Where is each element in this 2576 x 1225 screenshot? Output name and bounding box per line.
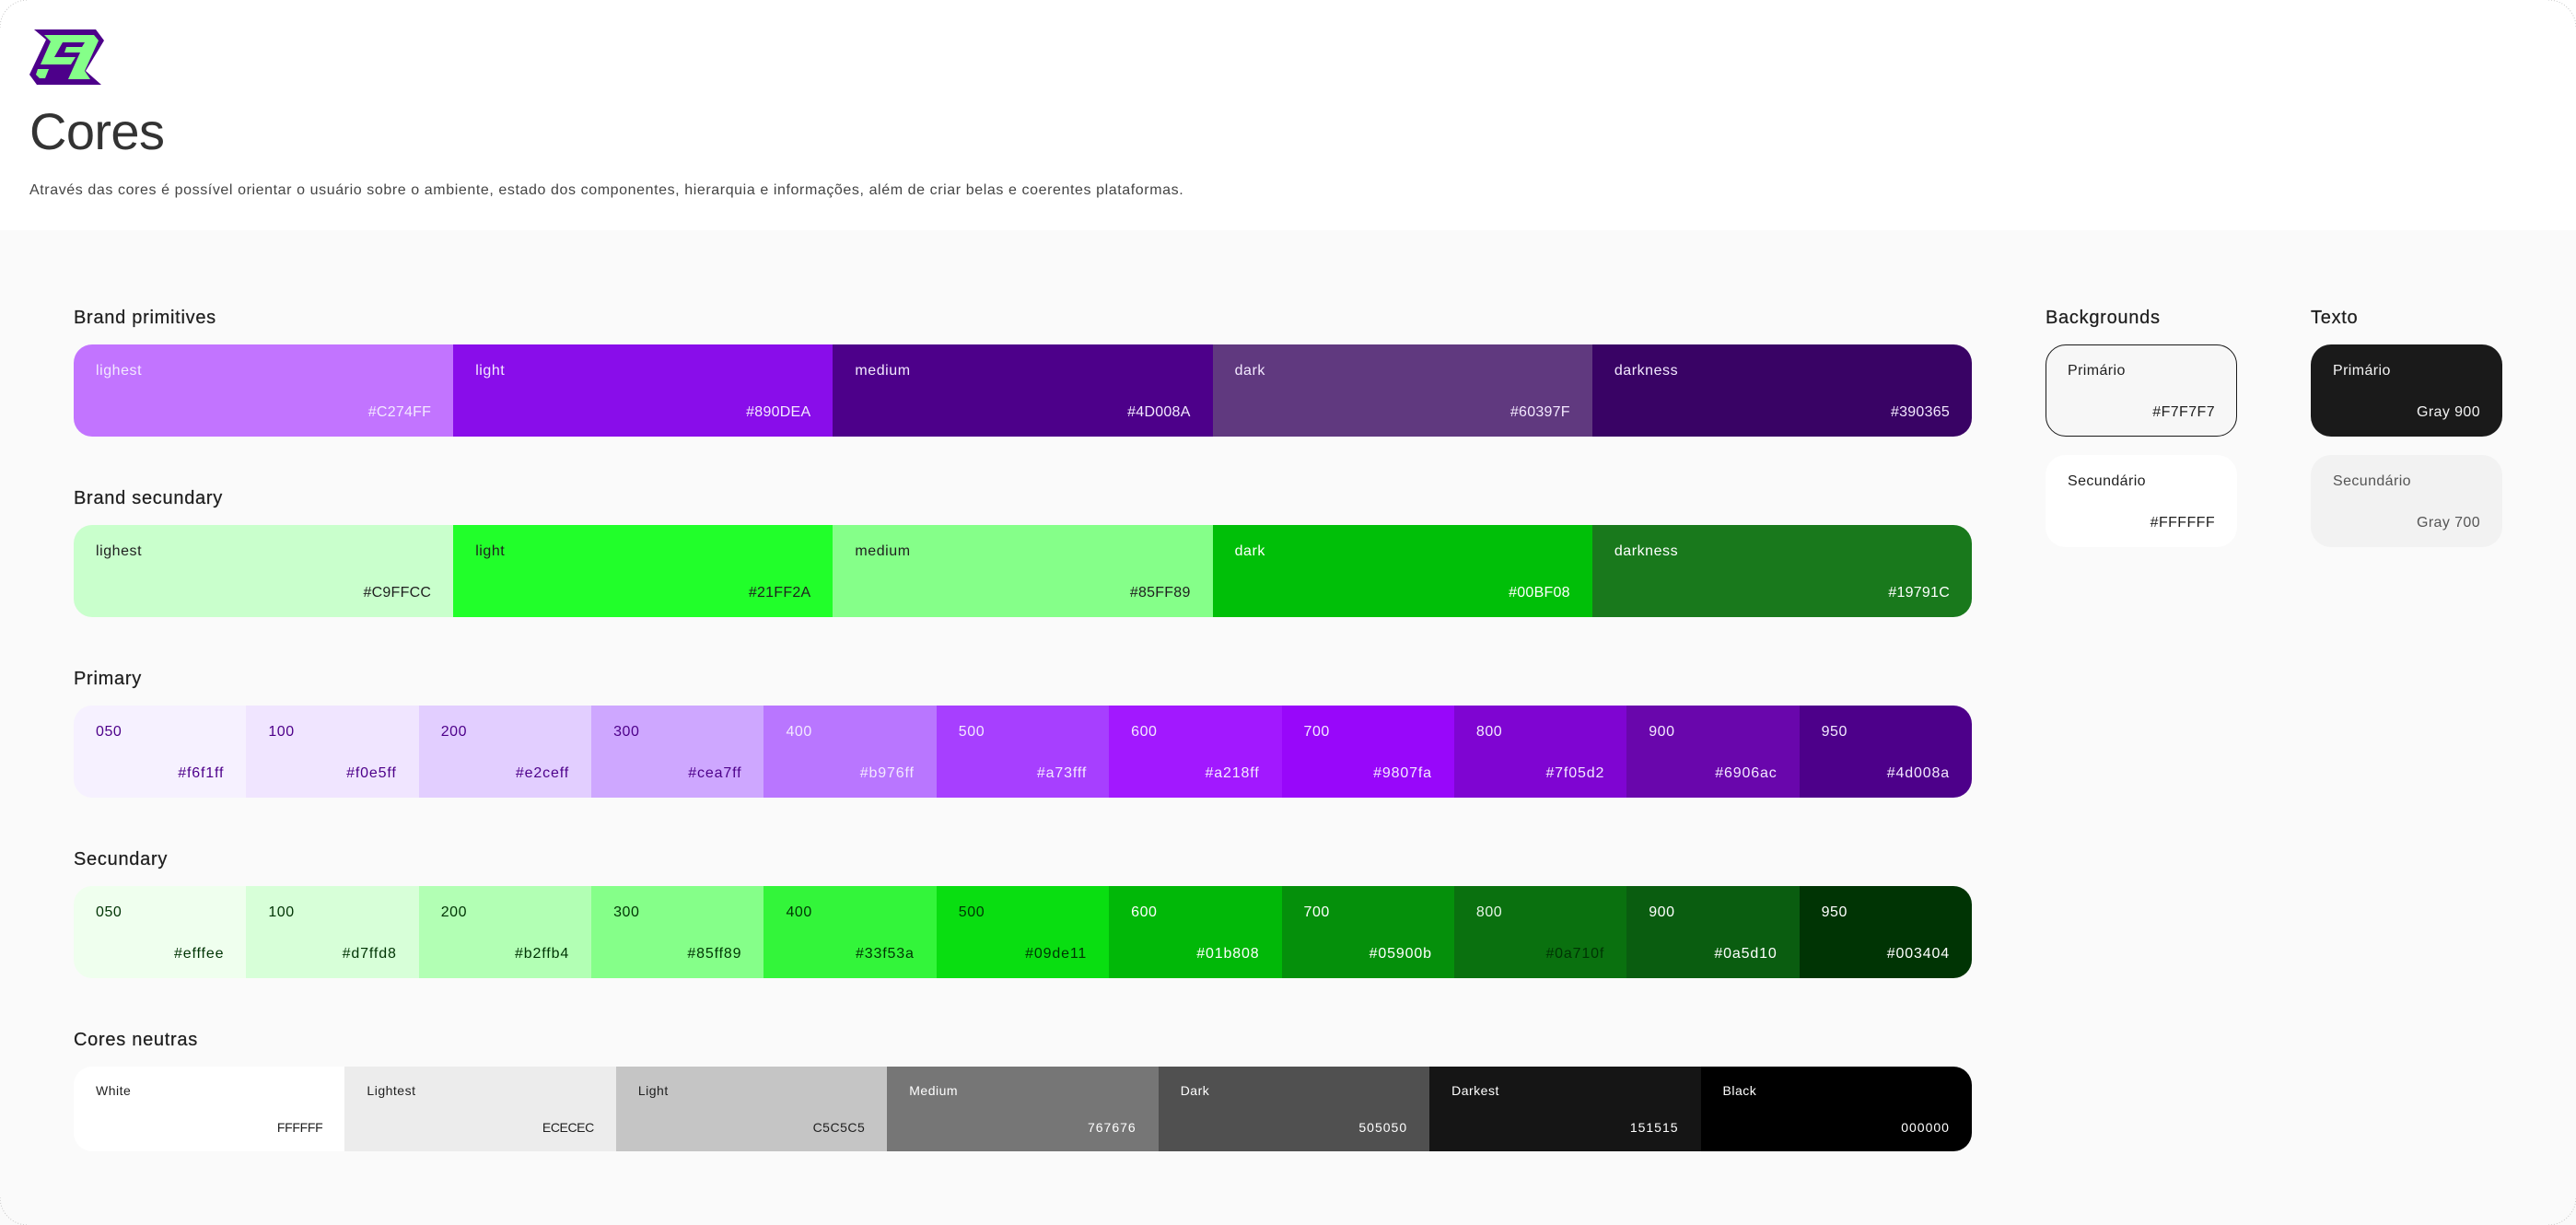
card: background secondary [2046,455,2237,547]
heading: cores neutras: Cores neutras [74,1030,198,1050]
palette: secundary: 600 [1131,904,1158,920]
palette: primary: 500 [959,724,985,740]
palette: brand primitives: #60397F [1510,404,1570,420]
palette: brand primitives: darkness [1614,363,1678,379]
palette: secundary: 700 [1304,904,1330,920]
palette: primary: 950 [1822,724,1847,740]
palette: secundary: 050 [96,904,122,920]
icon: brand logo [29,29,104,85]
card: text primary [2311,344,2502,437]
palette: brand secundary: medium [855,543,911,559]
palette: secundary: #05900b [1370,946,1432,962]
header panel [0,0,2576,230]
palette: cores neutras: 000000 [1901,1120,1950,1135]
palette: brand secundary: #85FF89 [1130,585,1191,601]
palette: primary: #9807fa [1373,765,1432,781]
palette: cores neutras: ECECEC [542,1120,594,1135]
palette: primary: 400 [786,724,812,740]
palette: primary: #a218ff [1205,765,1260,781]
palette: brand secundary: light [475,543,505,559]
palette: secundary: 950 [1822,904,1847,920]
palette: brand secundary: darkness [1614,543,1678,559]
palette: primary: 300 [613,724,639,740]
palette: primary: #4d008a [1887,765,1950,781]
palette: secundary: 100 [268,904,295,920]
palette: secundary: #33f53a [856,946,915,962]
palette: brand primitives: #C274FF [368,404,431,420]
palette: primary: 900 [1649,724,1675,740]
heading: brand primitives: Brand primitives [74,308,216,328]
card: text secondary: Secundário [2333,473,2411,489]
palette: primary: 050 [96,724,122,740]
palette: secundary: 500 [959,904,985,920]
palette: brand primitives: lighest [96,363,142,379]
card: text secondary [2311,455,2502,547]
palette: secundary: #85ff89 [687,946,741,962]
palette: primary: 100 [268,724,295,740]
palette: primary: #6906ac [1715,765,1778,781]
palette: primary: #7f05d2 [1545,765,1604,781]
palette: cores neutras: Dark [1181,1083,1209,1098]
palette: primary: #f0e5ff [346,765,397,781]
palette: brand primitives: #390365 [1891,404,1950,420]
palette: brand secundary: #C9FFCC [363,585,431,601]
palette: cores neutras: Lightest [367,1083,415,1098]
palette: brand secundary: #21FF2A [749,585,810,601]
palette: cores neutras: 151515 [1630,1120,1679,1135]
card: text primary: Primário [2333,363,2391,379]
palette: secundary [74,886,1972,978]
palette: cores neutras: FFFFFF [277,1120,322,1135]
palette: brand secundary: lighest [96,543,142,559]
palette: brand secundary: dark [1235,543,1265,559]
palette: cores neutras: Darkest [1451,1083,1499,1098]
palette: primary: 700 [1304,724,1330,740]
palette: secundary: #efffee [174,946,224,962]
palette: secundary: 200 [441,904,467,920]
card: background secondary: Secundário [2068,473,2146,489]
palette: primary: #cea7ff [688,765,741,781]
card: background primary: Primário [2068,363,2126,379]
heading: texto: Texto [2311,308,2358,328]
palette: secundary: #09de11 [1025,946,1087,962]
description: Através das cores é possível orientar o usuário sobre o ambiente, estado dos componentes, hierarquia e informações, além de criar belas e coerentes plataformas. [29,182,1183,198]
palette: brand secundary [74,525,1972,617]
palette: brand primitives: #4D008A [1127,404,1191,420]
palette: brand primitives: #890DEA [746,404,810,420]
card: background primary: #F7F7F7 [2152,404,2215,420]
heading: secundary: Secundary [74,849,168,869]
card: background secondary: #FFFFFF [2151,515,2215,531]
palette: cores neutras: Medium [909,1083,958,1098]
palette: secundary: #0a5d10 [1714,946,1778,962]
title: Cores [29,102,164,160]
palette: cores neutras: 767676 [1088,1120,1136,1135]
palette: brand primitives: light [475,363,505,379]
palette: secundary: #b2ffb4 [515,946,569,962]
palette: cores neutras: Light [638,1083,669,1098]
heading: primary: Primary [74,669,142,689]
card: text primary: Gray 900 [2417,404,2480,420]
palette: secundary: #d7ffd8 [343,946,397,962]
palette: cores neutras: C5C5C5 [813,1120,865,1135]
palette: primary: #f6f1ff [178,765,224,781]
palette: secundary: #01b808 [1196,946,1260,962]
palette: secundary: #003404 [1887,946,1950,962]
palette: cores neutras: White [96,1083,131,1098]
palette: cores neutras [96,1067,1972,1151]
palette: cores neutras: 505050 [1358,1120,1407,1135]
palette: primary: #e2ceff [516,765,569,781]
palette: secundary: 300 [613,904,639,920]
palette: primary: 600 [1131,724,1158,740]
palette: primary: #a73fff [1037,765,1087,781]
palette: cores neutras: Black [1723,1083,1756,1098]
palette: brand primitives: dark [1235,363,1265,379]
palette: secundary: #0a710f [1545,946,1604,962]
palette: brand primitives: medium [855,363,911,379]
card: text secondary: Gray 700 [2417,515,2480,531]
palette: primary: #b976ff [860,765,915,781]
palette: secundary: 800 [1476,904,1502,920]
palette: secundary: 400 [786,904,812,920]
palette: brand secundary: #19791C [1888,585,1950,601]
palette: primary: 200 [441,724,467,740]
card: background primary [2046,344,2237,437]
palette: brand primitives [74,344,1972,437]
palette: primary: 800 [1476,724,1502,740]
heading: brand secundary: Brand secundary [74,488,223,508]
heading: backgrounds: Backgrounds [2046,308,2161,328]
palette: secundary: 900 [1649,904,1675,920]
palette: primary [74,706,1972,798]
palette: brand secundary: #00BF08 [1509,585,1570,601]
